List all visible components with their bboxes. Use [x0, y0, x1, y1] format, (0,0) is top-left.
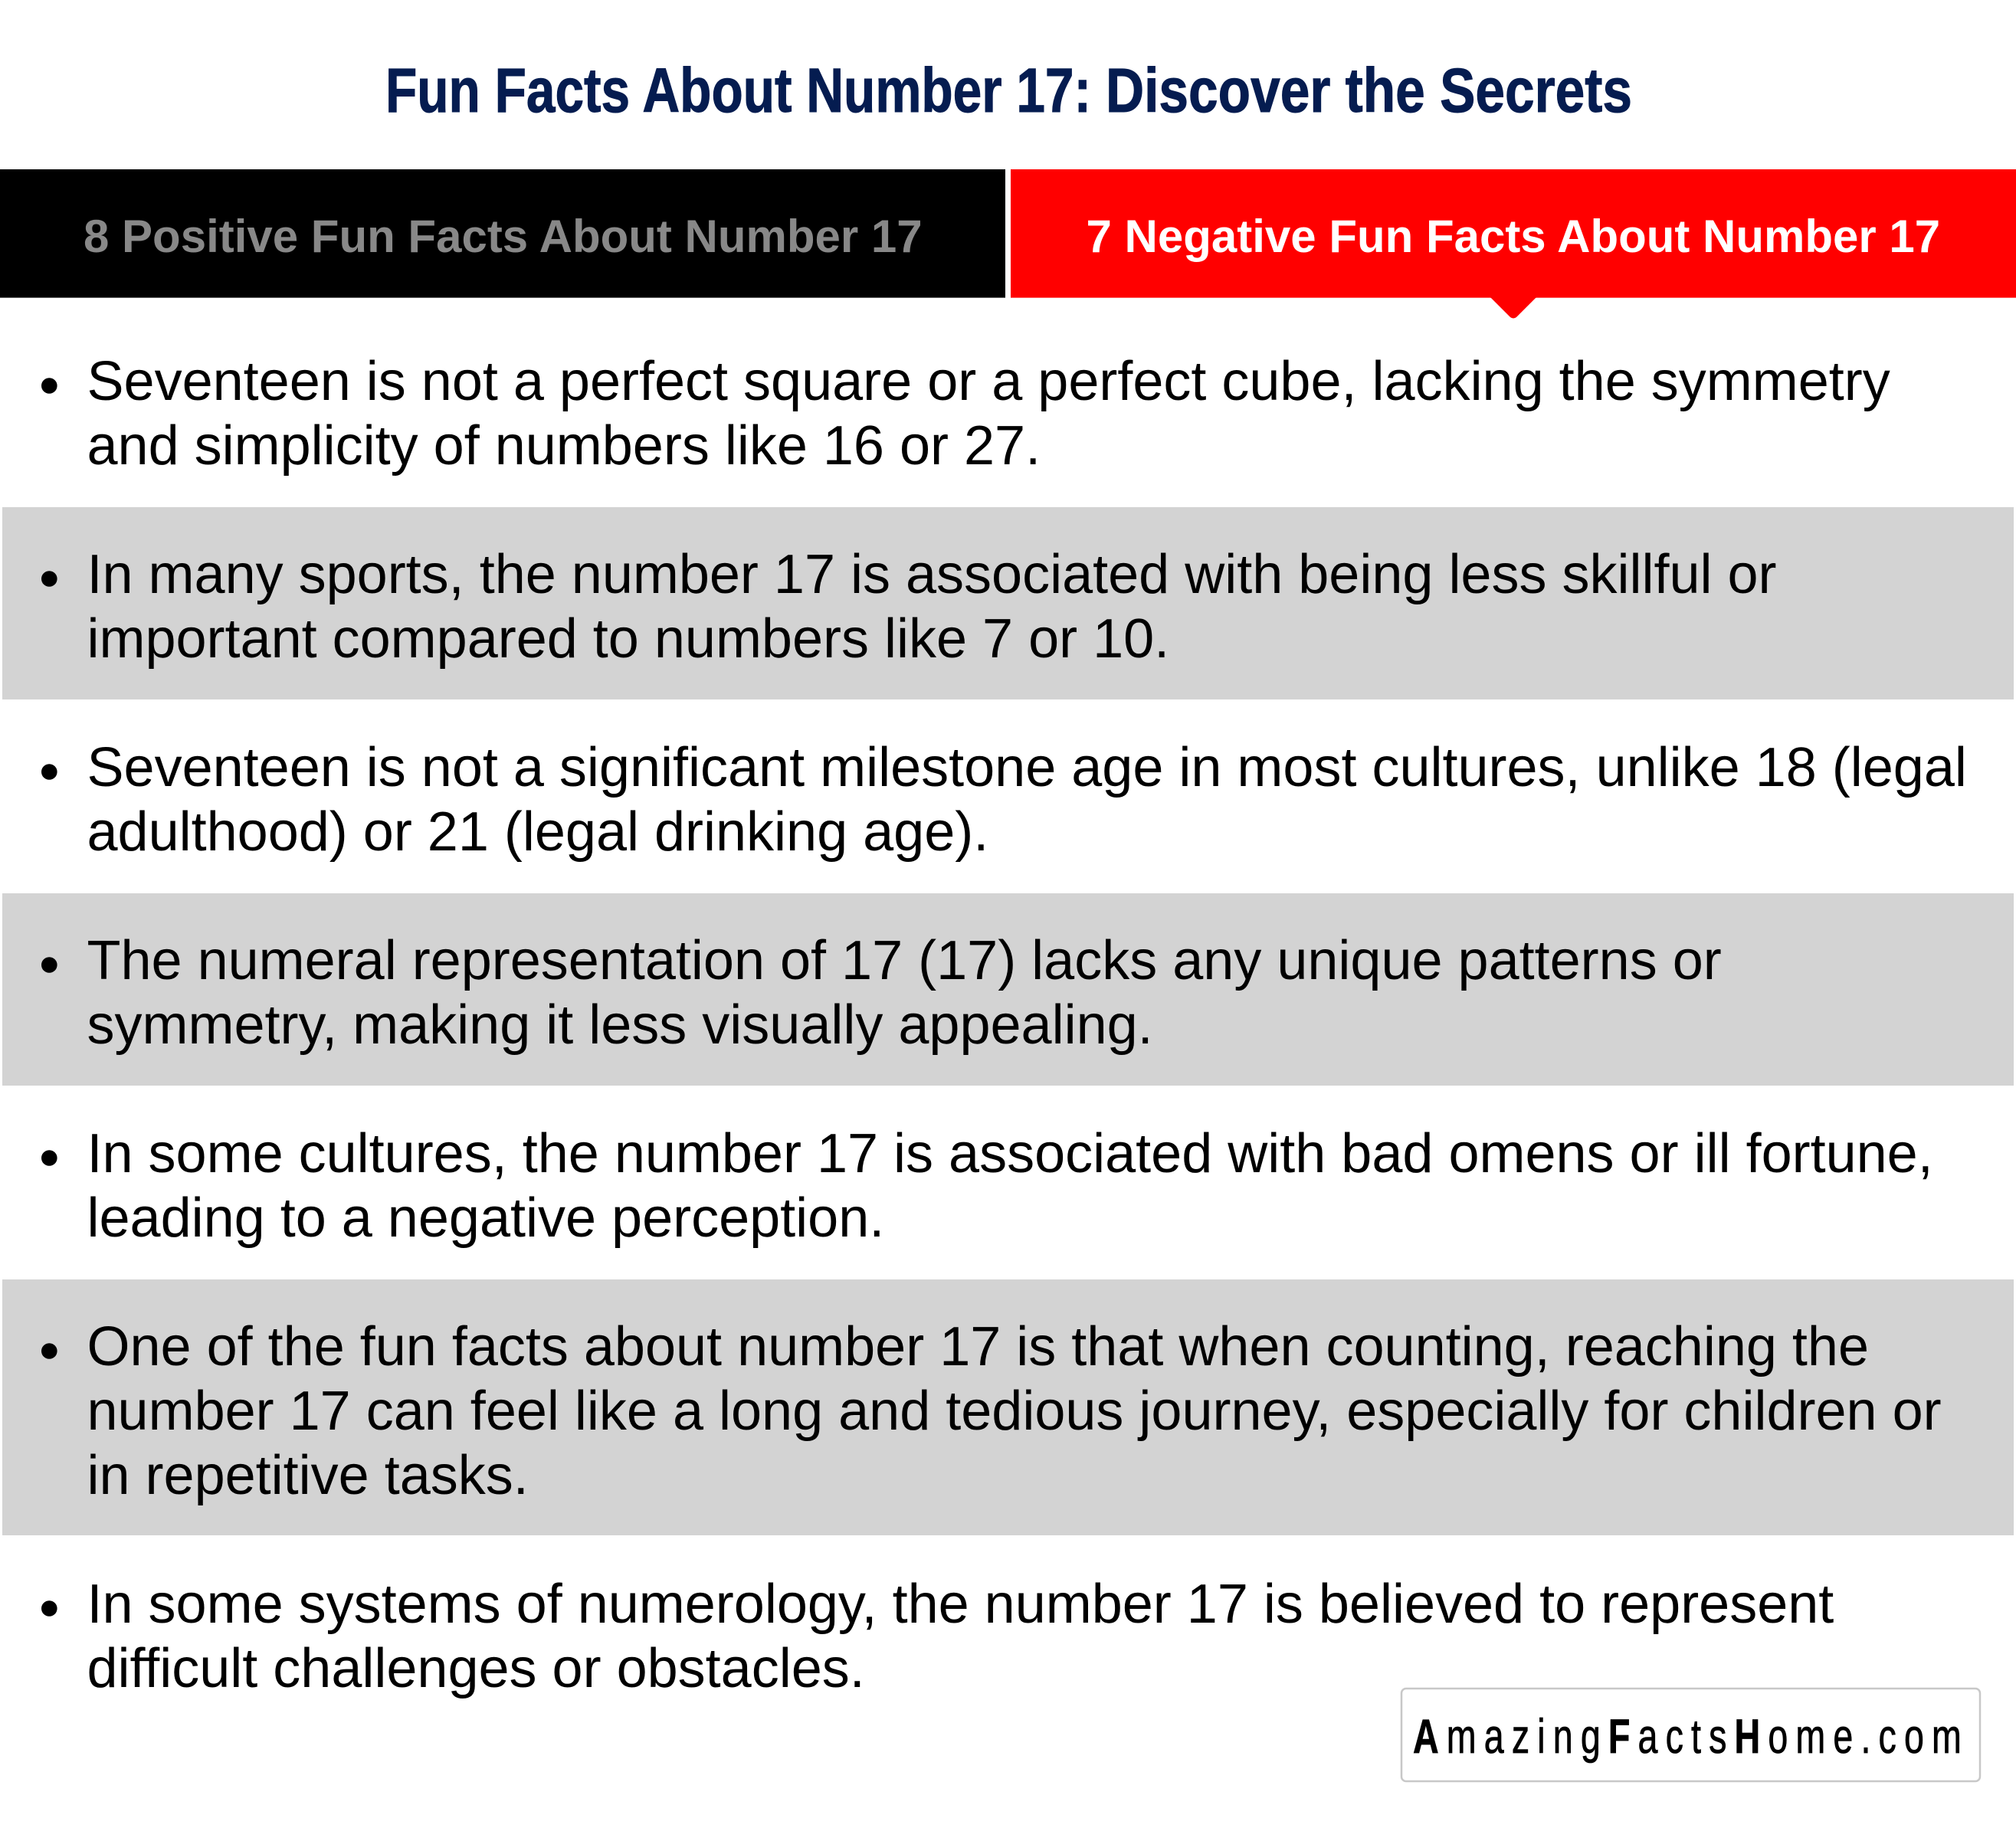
fact 2: important compared to numbers like 7 or 10.	[87, 608, 1169, 670]
fact 1	[41, 351, 1890, 477]
fact 6: One of the fun facts about number 17 is that when counting, reaching the	[87, 1316, 1869, 1377]
fact 6: number 17 can feel like a long and tedious journey, especially for children or	[87, 1381, 1942, 1442]
fact 2	[2, 507, 2014, 699]
fact 4: symmetry, making it less visually appealing.	[87, 994, 1153, 1056]
fact 5: leading to a negative perception.	[87, 1187, 884, 1249]
tab: negative fun facts (active): 7 Negative Fun Facts About Number 17	[1087, 211, 1940, 262]
title: Discover the Secrets	[1106, 56, 1632, 126]
watermark: AmazingFactsHome.com	[1401, 1689, 1980, 1781]
fact 2: In many sports, the number 17 is associated with being less skillful or	[87, 544, 1777, 605]
fact 1: and simplicity of numbers like 16 or 27.	[87, 415, 1041, 477]
fact 6	[2, 1279, 2014, 1535]
fact 4: The numeral representation of 17 (17) lacks any unique patterns or	[87, 930, 1722, 991]
fact 3	[41, 737, 1967, 863]
tab: negative fun facts (active)	[1011, 169, 2016, 319]
title: Fun Facts About Number 17:	[385, 56, 1091, 126]
icon: tab pointer	[1490, 297, 1536, 319]
tab: positive fun facts	[0, 169, 1005, 298]
fact 3: adulthood) or 21 (legal drinking age).	[87, 801, 988, 863]
fact 6: in repetitive tasks.	[87, 1445, 529, 1506]
title	[385, 56, 1632, 126]
fact 7: In some systems of numerology, the number 17 is believed to represent	[87, 1574, 1834, 1635]
fact 7	[41, 1574, 1834, 1699]
watermark: AmazingFactsHome.com: AmazingFactsHome.com	[1413, 1709, 1969, 1764]
fact 7: difficult challenges or obstacles.	[87, 1638, 865, 1699]
fact 4	[2, 893, 2014, 1086]
fact 3: Seventeen is not a significant milestone age in most cultures, unlike 18 (legal	[87, 737, 1967, 798]
fact 5: In some cultures, the number 17 is associated with bad omens or ill fortune,	[87, 1123, 1933, 1184]
fact 1: Seventeen is not a perfect square or a perfect cube, lacking the symmetry	[87, 351, 1890, 412]
tab: positive fun facts: 8 Positive Fun Facts About Number 17	[84, 211, 923, 262]
fact 5	[41, 1123, 1933, 1249]
